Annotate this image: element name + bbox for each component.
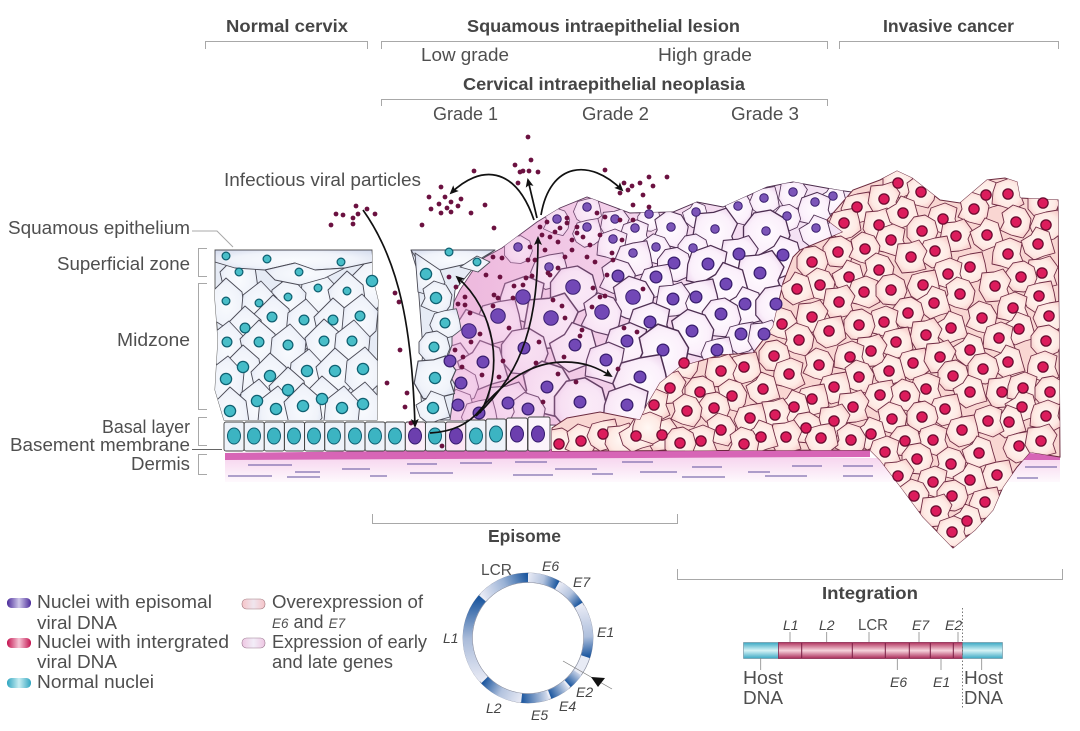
legend: overexpression: Overexpression of: [272, 592, 424, 612]
nuclei: teal normal: [226, 252, 477, 411]
bar labels: Host: [964, 668, 1003, 688]
heading: Normal cervix: [206, 16, 368, 49]
label: Dermis: Dermis: [131, 454, 190, 474]
label: Basement membrane: Basement membrane: [10, 435, 190, 455]
legend: integrated nuclei: Nuclei with intergrated: [37, 632, 229, 652]
label: Grade 3: Grade 3: [731, 104, 799, 124]
integration-site arrow: [563, 661, 612, 689]
bar labels: Host: [743, 668, 783, 688]
legend: integrated nuclei: [7, 632, 229, 672]
ring labels: E1: [597, 624, 614, 640]
legend: [7, 592, 427, 692]
bar labels: [743, 617, 1003, 708]
ring labels: E6: [542, 558, 559, 574]
legend: normal nuclei: Normal nuclei: [37, 672, 154, 692]
ring labels: E5: [531, 707, 548, 723]
label: Squamous epithelium: Squamous epithelium: [8, 218, 190, 238]
basal nuclei: [228, 426, 544, 444]
bar labels: DNA: [964, 688, 1003, 708]
label: Squamous epithelium: [8, 218, 233, 247]
integrated DNA bar: [743, 608, 1003, 708]
ring labels: L1: [443, 630, 459, 646]
arrows: [363, 170, 622, 433]
ring labels: [443, 558, 614, 723]
bar labels: LCR: [858, 617, 888, 634]
left stack of normal cells: [411, 250, 495, 424]
legend: episomal nuclei: Nuclei with episomal: [37, 592, 212, 612]
bracket and label: Integration: [678, 569, 1062, 603]
bracket and label: Episome: [372, 514, 678, 546]
label: Superficial zone: [57, 248, 207, 276]
legend: early and late genes: and late genes: [272, 652, 393, 672]
nuclei: purple episomal: [450, 192, 833, 413]
tissue illustration: [207, 137, 1066, 548]
legend: episomal nuclei: viral DNA: [37, 613, 117, 633]
legend: overexpression: E6 and E7: [272, 612, 346, 632]
label: Basal layer: [102, 417, 207, 446]
legend: integrated nuclei: viral DNA: [37, 652, 117, 672]
label: Superficial zone: Superficial zone: [57, 254, 190, 274]
heading: Squamous intraepithelial lesion: Squamous intraepithelial lesion: [467, 16, 740, 36]
heading: Normal cervix: Normal cervix: [226, 16, 348, 36]
ring labels: E7: [573, 574, 591, 590]
normal epithelium: [214, 250, 378, 420]
bar labels: E1: [933, 674, 950, 690]
label: High grade: High grade: [658, 45, 752, 65]
ring labels: E2: [576, 684, 593, 700]
bar labels: E7: [912, 617, 930, 633]
heading: Cervical intraepithelial neoplasia: Cervical intraepithelial neoplasia: [463, 74, 745, 94]
bracket and label: Episome: Episome: [488, 526, 561, 546]
heading: Invasive cancer: [840, 16, 1058, 49]
bar labels: DNA: [743, 688, 783, 708]
legend: overexpression: [242, 592, 424, 632]
bar labels: E2: [945, 617, 962, 633]
label: Grade 1: Grade 1: [433, 104, 498, 124]
bar labels: E6: [890, 674, 907, 690]
bar labels: L1: [783, 617, 799, 633]
basement membrane: [225, 448, 1060, 460]
dysplastic epithelium with episomal nuclei: [429, 180, 852, 434]
legend: early and late genes: Expression of early: [272, 632, 427, 652]
label: Infectious viral particles: Infectious viral particles: [224, 170, 421, 190]
label: Midzone: Midzone: [117, 330, 190, 350]
label: Low grade: Low grade: [421, 45, 509, 65]
legend: episomal nuclei: [7, 592, 212, 633]
ring labels: L2: [486, 700, 502, 716]
invasive carcinoma cells: [544, 167, 1066, 548]
ring labels: LCR: [481, 562, 512, 579]
heading: Invasive cancer: Invasive cancer: [883, 16, 1014, 36]
nuclei: red integrated: [559, 183, 1050, 532]
legend: early and late genes: [242, 632, 427, 672]
dermis: [225, 458, 1060, 482]
label: Basal layer: Basal layer: [102, 417, 190, 437]
ring labels: E4: [559, 698, 576, 714]
basal cell row: [224, 417, 550, 451]
heading: Squamous intraepithelial lesion: [382, 16, 828, 49]
bar labels: L2: [819, 617, 835, 633]
label: Midzone: [117, 284, 207, 410]
episome ring diagram: [443, 558, 614, 723]
bracket and label: Integration: Integration: [822, 583, 918, 603]
label: Grade 2: Grade 2: [582, 104, 649, 124]
infectious viral particles: [331, 137, 667, 446]
heading: Cervical intraepithelial neoplasia: [382, 74, 828, 106]
